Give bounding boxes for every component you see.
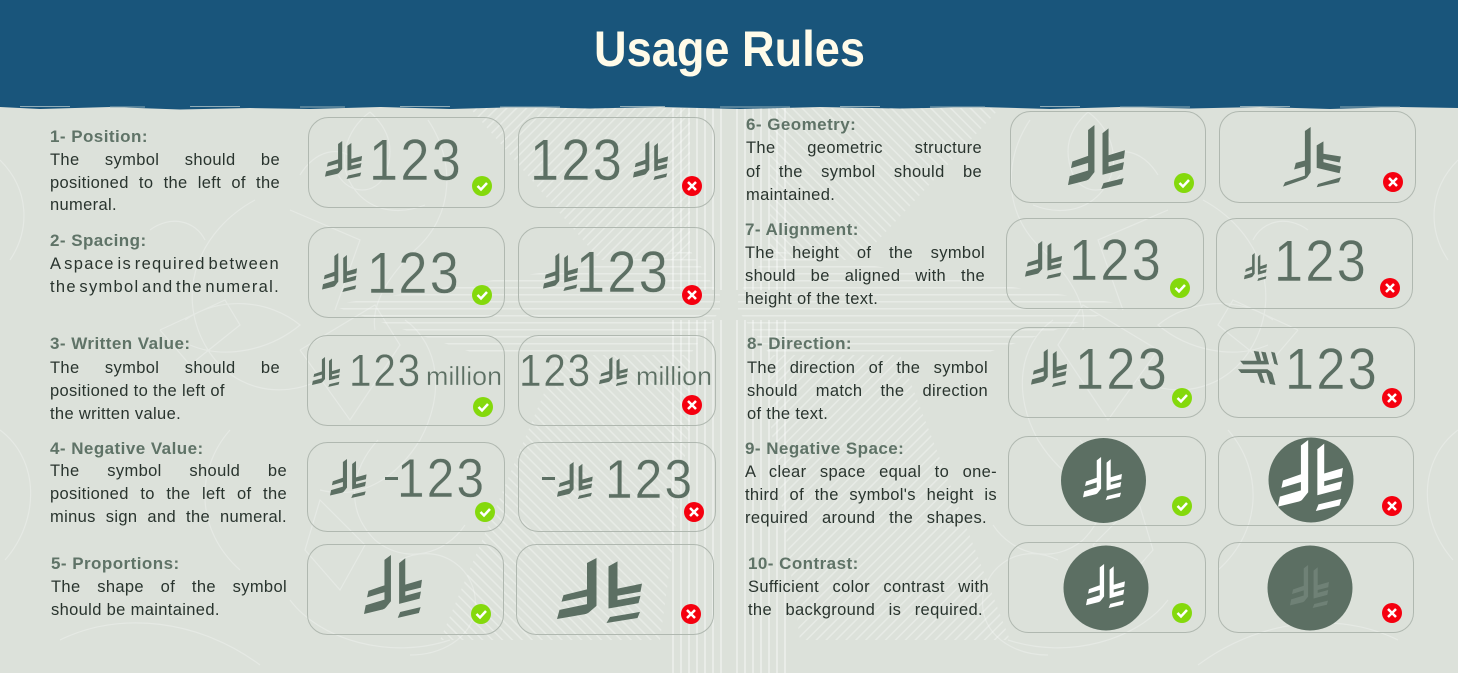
- example: correct contrast: [1008, 542, 1206, 633]
- text: rule 4: positioned to the left of the: [50, 484, 287, 502]
- text: rule 3: The symbol should be: [50, 358, 280, 376]
- example: correct, space present: [308, 227, 505, 318]
- heading: 9 Negative Space: 9- Negative Space:: [745, 439, 904, 458]
- example: incorrect, symbol between value and word: 123: [519, 346, 592, 397]
- text: rule 8: [747, 358, 988, 422]
- example: correct alignment: [1006, 218, 1204, 309]
- example: correct, space present: 123: [367, 240, 461, 306]
- panel: rule 1 position: [50, 117, 715, 214]
- text: rule 8: of the text.: [747, 404, 828, 422]
- panel: rule 7 alignment: [745, 218, 1413, 309]
- heading: 6 Geometry: 6- Geometry:: [746, 115, 856, 134]
- example: incorrect, no space: 123: [576, 239, 670, 305]
- heading: 1 Position: 1- Position:: [50, 127, 148, 146]
- text: rule 9: required around the shapes.: [745, 508, 987, 526]
- text: rule 4: The symbol should be: [50, 462, 287, 480]
- text: rule 7: The height of the symbol: [745, 244, 985, 262]
- example: correct, symbol before minus sign: 123: [397, 449, 486, 510]
- example: correct, symbol left of written value: 123: [349, 346, 422, 397]
- text: rule 9: A clear space equal to one-: [745, 462, 997, 480]
- example: incorrect, symbol right of numeral: 123: [530, 127, 624, 193]
- text: rule 6: [746, 138, 982, 204]
- example: incorrect, small symbol: 123: [1274, 228, 1368, 294]
- text: rule 1: numeral.: [50, 196, 117, 214]
- panel: rule 9 negative space: [745, 436, 1414, 526]
- example: incorrect, minus before symbol: 123: [605, 450, 694, 511]
- heading: 5 Proportions: 5- Proportions:: [51, 554, 180, 573]
- heading: 8 Direction: 8- Direction:: [747, 334, 852, 353]
- title: Usage Rules: [594, 21, 865, 77]
- text: rule 2: [50, 254, 280, 296]
- example: incorrect, minus before symbol: [518, 442, 716, 532]
- text: rule 6: of the symbol should be: [746, 162, 982, 180]
- text: rule 9: third of the symbol's height is: [745, 486, 997, 504]
- example: incorrect, no space: [518, 227, 715, 318]
- text: rule 2: A space is required between: [50, 254, 280, 272]
- example: incorrect, no clear space: [1218, 436, 1414, 526]
- example: correct alignment: 123: [1069, 227, 1163, 293]
- text: rule 7: [745, 244, 985, 308]
- text: rule 10: Sufficient color contrast with: [748, 578, 989, 596]
- example: incorrect, symbol right of numeral: [518, 117, 715, 208]
- text: rule 6: The geometric structure: [746, 138, 982, 156]
- text: rule 8: The direction of the symbol: [747, 358, 988, 376]
- text: rule 8: should match the direction: [747, 382, 988, 400]
- text: rule 10: the background is required.: [748, 600, 983, 618]
- example: correct, symbol left of written value: [307, 335, 505, 426]
- text: rule 1: positioned to the left of the: [50, 174, 280, 192]
- header banner: [0, 0, 1458, 110]
- example: correct, symbol before minus sign: [307, 442, 505, 532]
- panel: rule 6 geometry: [746, 111, 1416, 204]
- text: rule 10: [748, 578, 989, 618]
- example: incorrect, rotated symbol: 123: [1285, 336, 1379, 402]
- text: rule 7: should be aligned with the: [745, 266, 985, 284]
- panel: rule 8 direction: [747, 327, 1415, 422]
- panel: rule 10 contrast: [748, 542, 1414, 633]
- text: rule 1: [50, 150, 280, 214]
- heading: 4 Negative Value: 4- Negative Value:: [50, 439, 204, 458]
- text: rule 4: minus sign and the numeral.: [50, 508, 287, 526]
- text: rule 6: maintained.: [746, 186, 835, 204]
- panel: rule 2 spacing: [50, 227, 715, 318]
- example: correct, symbol left of numeral: [308, 117, 505, 208]
- text: rule 1: The symbol should be: [50, 150, 280, 168]
- example: correct proportions: [307, 544, 504, 635]
- example: correct, symbol left of numeral: 123: [369, 127, 463, 193]
- heading: 10 Contrast: 10- Contrast:: [748, 554, 859, 573]
- panel: rule 5 proportions: [51, 544, 714, 635]
- example: incorrect, rotated symbol: [1218, 327, 1415, 418]
- example: incorrect, symbol between value and word: [518, 335, 716, 426]
- text: rule 3: positioned to the left of: [50, 382, 225, 400]
- text: rule 3: the written value.: [50, 404, 181, 422]
- text: rule 5: should be maintained.: [51, 600, 220, 618]
- text: rule 3: [50, 358, 280, 422]
- panel: rule 4 negative value: [50, 439, 716, 532]
- text: rule 4: [50, 462, 287, 526]
- text: rule 5: [51, 578, 287, 618]
- example: incorrect, symbol between value and word: million: [636, 361, 712, 391]
- example: incorrect, stretched symbol: [516, 544, 714, 635]
- example: incorrect, altered geometry: [1219, 111, 1416, 203]
- example: incorrect, small symbol: [1216, 218, 1413, 309]
- panel: rule 3 written value: [50, 334, 716, 426]
- example: correct geometry: [1010, 111, 1206, 203]
- example: incorrect, low contrast: [1218, 542, 1414, 633]
- example: correct direction: 123: [1075, 336, 1169, 402]
- example: correct clear space: [1008, 436, 1206, 526]
- example: correct, symbol left of written value: million: [426, 361, 502, 391]
- heading: 7 Alignment: 7- Alignment:: [745, 220, 859, 239]
- heading: 2 Spacing: 2- Spacing:: [50, 231, 147, 250]
- text: rule 9: [745, 462, 997, 526]
- text: rule 7: height of the text.: [745, 290, 878, 308]
- text: rule 5: The shape of the symbol: [51, 578, 287, 596]
- heading: 3 Written Value: 3- Written Value:: [50, 334, 191, 353]
- text: rule 2: the symbol and the numeral.: [50, 278, 280, 296]
- example: correct direction: [1008, 327, 1206, 418]
